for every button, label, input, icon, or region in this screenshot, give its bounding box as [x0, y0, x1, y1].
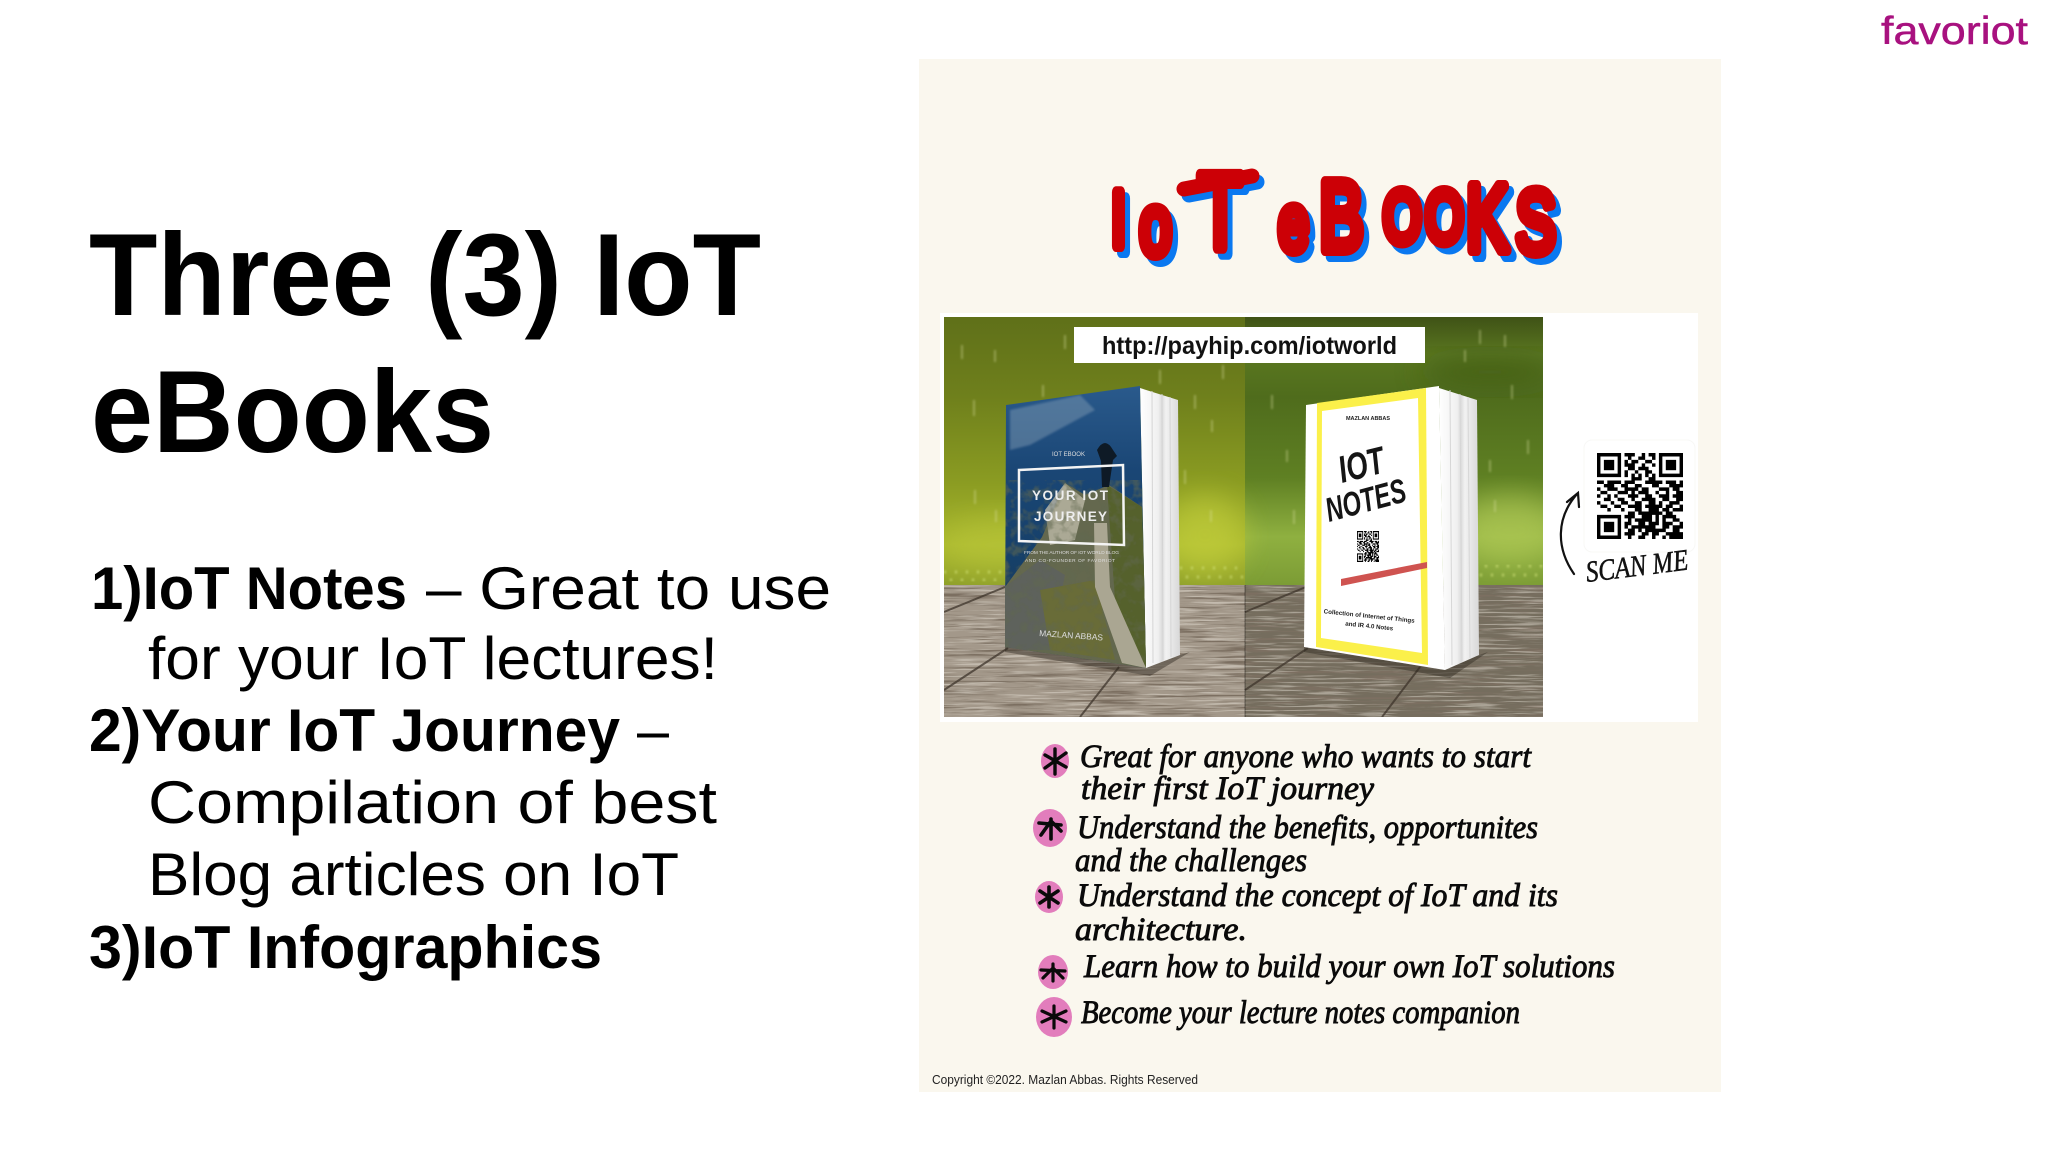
poster heading: IoT eBOOKS: B	[1324, 167, 1369, 277]
bullet 1	[1041, 744, 1069, 778]
poster heading: IoT eBOOKS	[1111, 153, 1561, 279]
bullet 2	[1033, 809, 1067, 847]
book: IoT Notes: and IR 4.0 Notes	[1345, 621, 1394, 633]
handwritten benefits list	[1033, 739, 1615, 1037]
small qr code on book cover	[1357, 532, 1379, 561]
poster heading: IoT eBOOKS: S	[1516, 172, 1556, 271]
book: IoT Notes: MAZLAN ABBAS	[1346, 416, 1390, 422]
book photo	[940, 317, 1560, 717]
book: Your IoT Journey: FROM THE AUTHOR OF IOT WORLD BLOG	[1024, 550, 1119, 556]
benefit 2 text	[1075, 810, 1538, 879]
benefit 5 text: Become your lecture notes companion	[1081, 995, 1520, 1031]
poster heading: IoT eBOOKS: o	[1145, 185, 1176, 279]
item 2: Your IoT Journey: Compilation of best	[148, 769, 717, 836]
logo: favoriot: favoriot	[1881, 10, 2028, 53]
book: IoT Notes: IOT	[1334, 439, 1391, 492]
book: Your IoT Journey: JOURNEY	[1034, 509, 1107, 524]
book: IoT Notes: NOTES	[1321, 472, 1410, 530]
title: eBooks	[91, 346, 494, 477]
item 1: IoT Notes: – Great to use	[426, 555, 831, 622]
qr code card	[1584, 440, 1695, 552]
benefit 3 text: Understand the concept of IoT and its	[1077, 878, 1558, 914]
title: Three (3) IoT	[89, 209, 761, 340]
benefit 2 text: and the challenges	[1075, 843, 1307, 879]
item 3: IoT Infographics: 3)IoT Infographics	[89, 914, 602, 981]
book contact shadows	[1005, 647, 1488, 678]
item 2: Your IoT Journey	[89, 697, 717, 908]
benefit 1 text: Great for anyone who wants to start	[1080, 739, 1532, 775]
title	[89, 209, 761, 477]
benefit 3 text	[1075, 878, 1558, 948]
white image card	[940, 313, 1698, 722]
benefit 1 text	[1080, 739, 1532, 807]
poster heading: IoT eBOOKS: I	[1111, 177, 1126, 264]
item 1: IoT Notes	[91, 555, 831, 692]
book: Your IoT Journey	[1005, 386, 1180, 670]
poster heading: IoT eBOOKS: o	[1140, 179, 1171, 273]
scan me label: SCAN ME	[1584, 544, 1690, 589]
poster panel	[919, 59, 1721, 1092]
poster heading: IoT eBOOKS: K	[1471, 172, 1513, 276]
poster heading: IoT eBOOKS: S	[1521, 178, 1561, 277]
poster heading: IoT eBOOKS: e	[1283, 185, 1314, 274]
copyright: Copyright ©2022. Mazlan Abbas. Rights Reserved	[932, 1073, 1198, 1087]
benefit 4 text: Learn how to build your own IoT solutions	[1083, 949, 1615, 985]
poster heading: IoT eBOOKS: K	[1466, 166, 1508, 270]
book: Your IoT Journey: IOT EBOOK	[1052, 452, 1085, 458]
item 1: IoT Notes: 1)IoT Notes	[91, 555, 407, 622]
item 2: Your IoT Journey: –	[637, 697, 670, 764]
poster heading: IoT eBOOKS: e	[1278, 179, 1309, 268]
poster heading: IoT eBOOKS: B	[1319, 161, 1364, 271]
item 2: Your IoT Journey: 2)Your IoT Journey	[89, 697, 621, 764]
poster heading: IoT eBOOKS: O	[1430, 184, 1468, 264]
book: IoT Notes	[1304, 386, 1479, 670]
url label: http://payhip.com/iotworld	[1102, 332, 1397, 360]
item 2: Your IoT Journey: Blog articles on IoT	[148, 841, 679, 908]
book: IoT Notes: Collection of Internet of Things	[1323, 608, 1416, 625]
arrow pointing to qr code	[1561, 493, 1579, 574]
bullet 5	[1036, 997, 1072, 1037]
poster heading: IoT eBOOKS: T	[1198, 153, 1242, 271]
bullet 4	[1038, 955, 1068, 989]
poster heading: IoT eBOOKS: O	[1425, 178, 1463, 258]
poster heading: IoT eBOOKS: T	[1203, 159, 1247, 277]
green rainy backdrop	[940, 317, 1560, 585]
poster heading: IoT eBOOKS: O	[1383, 178, 1421, 258]
poster heading: IoT eBOOKS: O	[1388, 184, 1426, 264]
book: Your IoT Journey: AND CO-FOUNDER OF FAVORIOT	[1025, 558, 1115, 564]
url label	[1074, 327, 1425, 363]
item 1: IoT Notes: for your IoT lectures!	[148, 625, 718, 692]
bullet 3	[1035, 881, 1063, 913]
poster heading: IoT eBOOKS: I	[1116, 183, 1131, 270]
book: Your IoT Journey: YOUR IOT	[1032, 488, 1109, 503]
wooden table	[944, 585, 1543, 717]
benefit 3 text: architecture.	[1075, 912, 1247, 948]
benefit 1 text: their first IoT journey	[1081, 771, 1374, 807]
benefit 2 text: Understand the benefits, opportunites	[1077, 810, 1538, 846]
list of three ebooks	[89, 555, 831, 981]
book: Your IoT Journey: MAZLAN ABBAS	[1039, 628, 1104, 642]
